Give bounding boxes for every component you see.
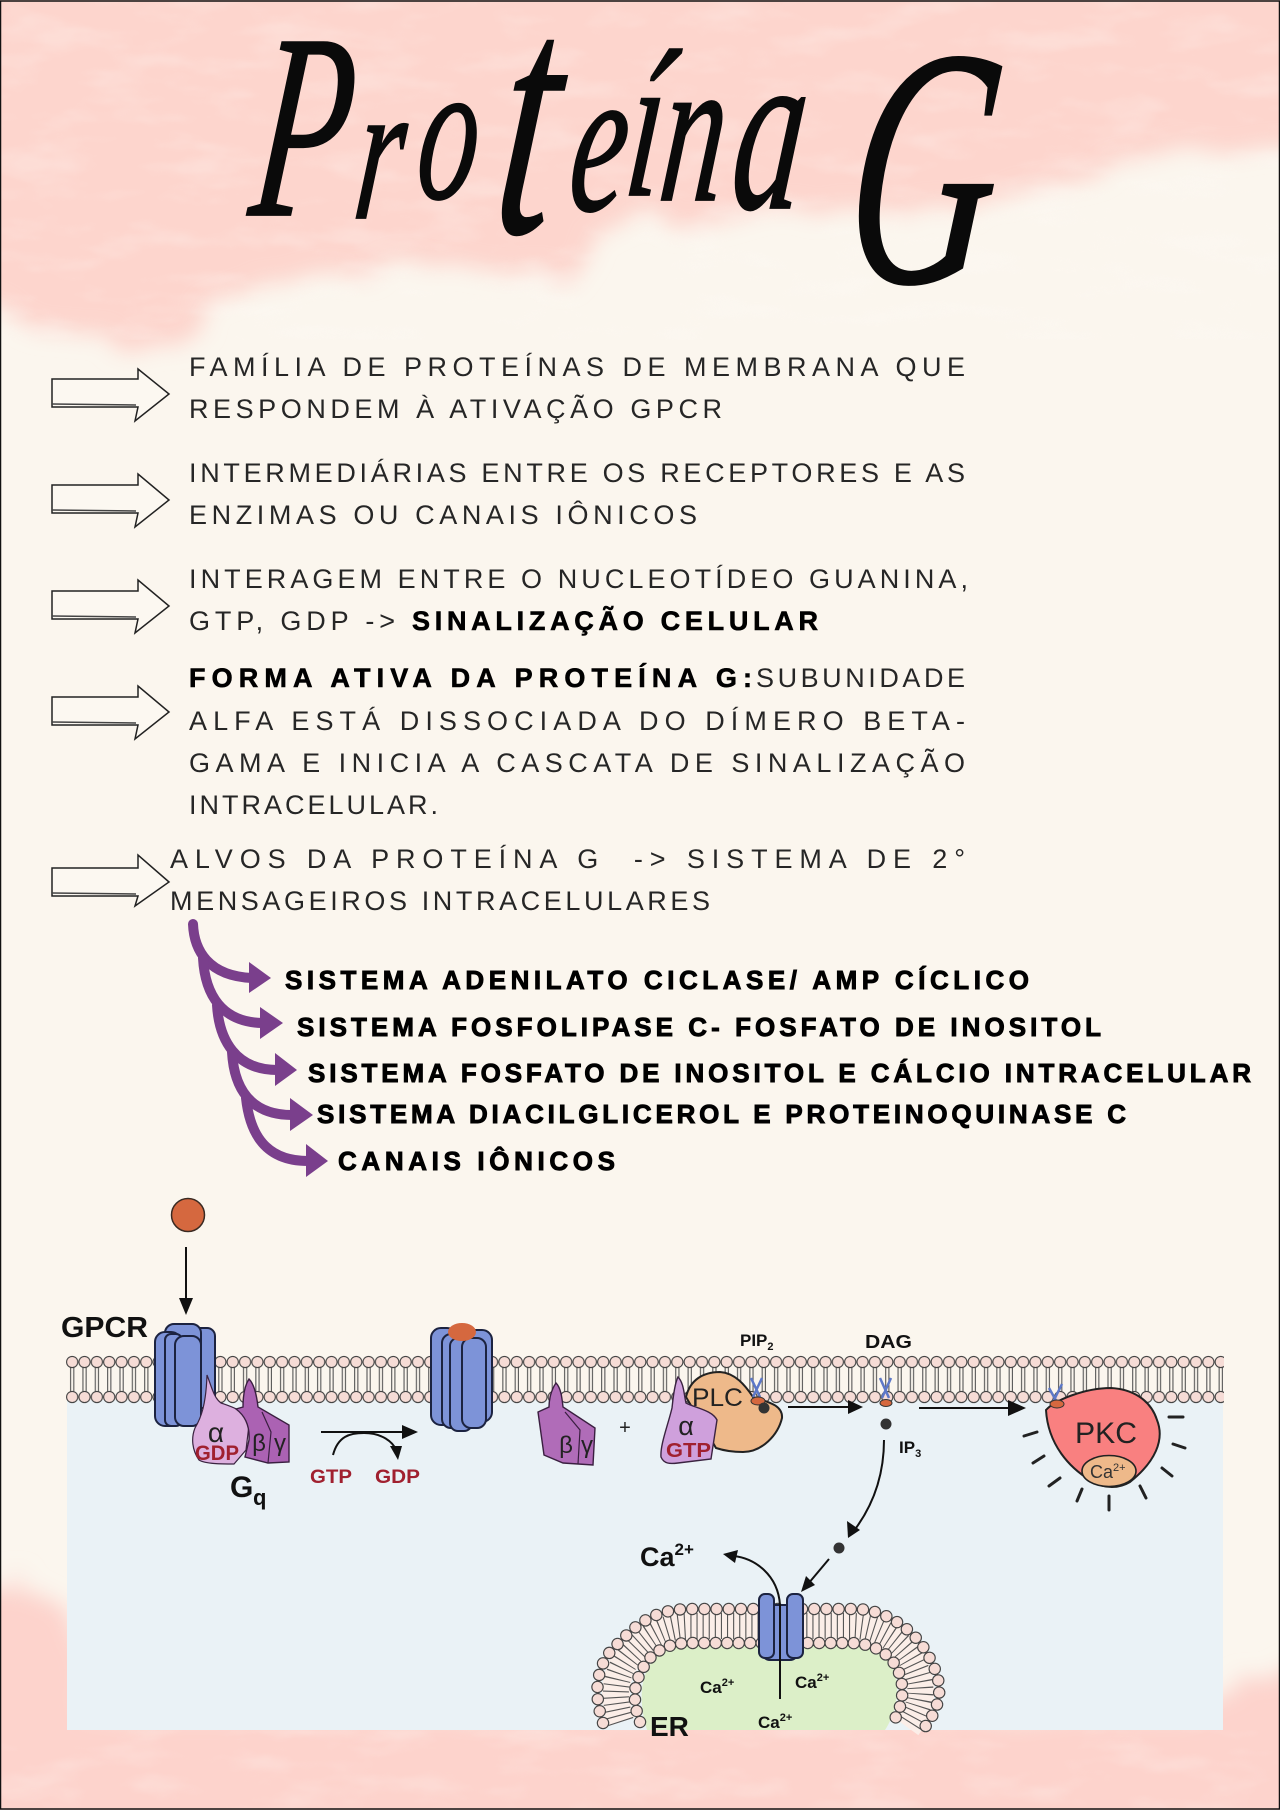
label: Ca2+ right: Ca: [795, 1673, 817, 1692]
icon: IP3 receptor channel: [759, 1594, 803, 1660]
text block: alvos: MENSAGEIROS INTRACELULARES: [170, 886, 710, 916]
arrow: ligand to receptor: [179, 1247, 193, 1315]
icon: free beta gamma: γ: [581, 1432, 593, 1459]
icon: PLC: PLC: [692, 1384, 743, 1412]
label: Gq: G: [230, 1471, 253, 1504]
icon: IP3 free molecule: [834, 1542, 844, 1554]
text block: família: FAMÍLIA DE PROTEÍNAS DE MEMBRANA QUE: [189, 352, 965, 382]
icon: ER membrane: [597, 1609, 939, 1727]
icon: PKC: 2+: [1113, 1462, 1126, 1474]
arrow: IP3 to channel end: [801, 1559, 829, 1592]
list: sistemas: SISTEMA ADENILATO CICLASE/ AMP CÍCLICO: [285, 965, 1029, 995]
arrow: PLC to DAG: [788, 1400, 863, 1414]
list: sistemas: SISTEMA FOSFOLIPASE C- FOSFATO DE INOSITOL: [297, 1012, 1101, 1042]
icon: arrow 5: [52, 855, 169, 906]
label: Ca2+ right: 2+: [817, 1672, 829, 1684]
icon: IP3 molecule: [880, 1418, 892, 1430]
label: GDP: GDP: [375, 1467, 420, 1488]
label: IP3: 3: [915, 1448, 921, 1460]
text block: intermediárias: ENZIMAS OU CANAIS IÔNICOS: [189, 499, 697, 530]
icon: G-alpha GDP: GDP: [195, 1442, 239, 1465]
icon: free beta gamma: [538, 1383, 595, 1465]
arrow: GTP exchange: [321, 1425, 418, 1460]
diagram: plasma membrane: [66, 1354, 1224, 1406]
label: ER: ER: [650, 1711, 689, 1742]
text block: forma ativa: INTRACELULAR.: [189, 790, 438, 820]
icon: G-alpha GTP: GTP: [666, 1440, 711, 1462]
icon: beta gamma on Gq: γ: [274, 1430, 286, 1457]
icon: arrow 1: [52, 369, 169, 421]
text block: forma ativa: [189, 662, 965, 820]
icon: PKC: [1046, 1384, 1160, 1487]
icon: beta gamma on Gq: β: [252, 1430, 266, 1457]
text block: intermediárias: [189, 458, 965, 530]
icon: PIP2 molecule: [751, 1378, 770, 1414]
label: PIP2: PIP: [740, 1331, 767, 1350]
arrow: DAG to PKC: [919, 1400, 1026, 1416]
label: Ca2+ bottom: Ca: [758, 1713, 780, 1732]
text block: forma ativa: ALFA ESTÁ DISSOCIADA DO DÍMERO BETA-: [189, 706, 965, 736]
label: Gq: q: [253, 1485, 266, 1510]
icon: ER lumen: [642, 1644, 897, 1730]
icon: activated GPCR barrel: [431, 1323, 492, 1431]
title: a: [722, 0, 821, 260]
icon: PKC: PKC: [1075, 1417, 1137, 1450]
text block: alvos: ALVOS DA PROTEÍNA G -> SISTEMA DE 2°: [170, 844, 965, 874]
text block: alvos: [170, 844, 965, 916]
icon: G-alpha GDP: [193, 1375, 249, 1465]
text block: intermediárias: INTERMEDIÁRIAS ENTRE OS RECEPTORES E AS: [189, 458, 965, 488]
icon: beta gamma on Gq: [236, 1379, 289, 1463]
background: pink watercolor bottom: [0, 1575, 1280, 1810]
background: pink mottling top: [0, 0, 1280, 340]
arrow: calcium release: [723, 1550, 780, 1699]
background: pink mottling bottom: [0, 1730, 1280, 1810]
title: í: [618, 8, 687, 241]
label: DAG: DAG: [865, 1332, 912, 1352]
icon: PKC charges: [1024, 1417, 1185, 1510]
icon: PKC: Ca: [1090, 1462, 1113, 1482]
text block: família: RESPONDEM À ATIVAÇÃO GPCR: [189, 393, 722, 424]
list: sistemas: CANAIS IÔNICOS: [338, 1146, 615, 1176]
icon: arrow 3: [52, 580, 169, 633]
purple branching arrows: [193, 924, 328, 1177]
arrow: IP3 to channel: [847, 1440, 884, 1538]
label: Ca2+ left: Ca: [700, 1678, 722, 1697]
text block: família: [189, 352, 965, 424]
label: Ca2+ cytosol: Ca: [640, 1542, 675, 1572]
icon: arrow 2: [52, 474, 169, 527]
icon: GPCR barrel: [155, 1324, 215, 1426]
title: e: [561, 23, 641, 256]
label: plus: +: [619, 1417, 631, 1439]
diagram: cell panel: [67, 1400, 1223, 1730]
label: Ca2+ bottom: 2+: [780, 1712, 792, 1724]
title: n: [652, 13, 740, 246]
label: GTP: GTP: [310, 1467, 352, 1488]
label: GPCR: GPCR: [61, 1312, 148, 1344]
text block: interagem: INTERAGEM ENTRE O NUCLEOTÍDEO GUANINA,: [189, 564, 968, 594]
label: Gq: [230, 1471, 266, 1510]
icon: arrow 4: [52, 686, 169, 739]
icon: G-alpha GDP: α: [208, 1417, 224, 1448]
background: pink watercolor top: [0, 0, 1280, 350]
text block: forma ativa: SUBUNIDADE: [756, 663, 965, 693]
text block: interagem: [189, 564, 968, 636]
icon: PLC: [686, 1372, 782, 1452]
text block: interagem: SINALIZAÇÃO CELULAR: [412, 605, 818, 636]
text block: forma ativa: GAMA E INICIA A CASCATA DE SINALIZAÇÃO: [189, 747, 965, 778]
title: r: [347, 39, 417, 261]
label: Ca2+ left: 2+: [722, 1677, 734, 1689]
list: sistemas: [285, 965, 1251, 1176]
icon: free beta gamma: β: [559, 1432, 573, 1459]
icon: G-alpha GTP: [661, 1377, 717, 1463]
label: IP3: IP: [899, 1438, 915, 1457]
icon: DAG molecule: [880, 1378, 892, 1406]
icon: G-alpha GTP: α: [678, 1411, 694, 1441]
list: sistemas: SISTEMA DIACILGLICEROL E PROTEINOQUINASE C: [317, 1099, 1126, 1129]
label: PIP2: 2: [767, 1341, 774, 1353]
icon: ligand: [172, 1198, 204, 1232]
title: o: [409, 19, 492, 241]
list: sistemas: SISTEMA FOSFATO DE INOSITOL E CÁLCIO INTRACELULAR: [308, 1058, 1251, 1088]
text block: interagem: GTP, GDP ->: [189, 606, 395, 636]
text block: forma ativa: FORMA ATIVA DA PROTEÍNA G:: [189, 662, 752, 693]
label: Ca2+ cytosol: 2+: [675, 1540, 694, 1559]
